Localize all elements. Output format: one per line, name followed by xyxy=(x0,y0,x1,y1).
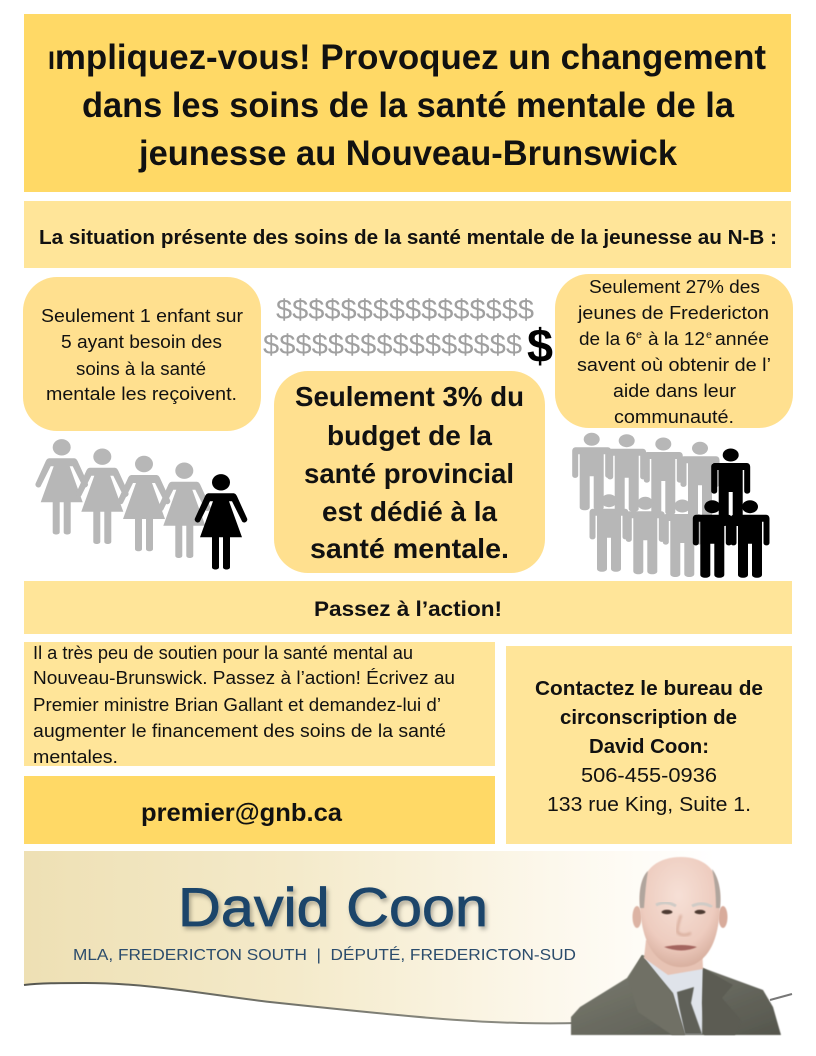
icon: group of people, 27% highlighted xyxy=(572,433,770,578)
callout: 27% des jeunes: Seulement 27% des xyxy=(589,276,760,297)
title heading xyxy=(48,38,766,173)
callout: 3% du budget: santé provincial xyxy=(304,458,514,489)
callout: 27% des jeunes: de la 6 xyxy=(579,328,636,349)
contact panel: 506-455-0936 xyxy=(581,764,717,787)
callout: 27% des jeunes: à la 12 xyxy=(648,328,705,349)
action text panel: Il a très peu de soutien pour la santé mental au xyxy=(33,642,413,663)
action text panel: Nouveau-Brunswick. Passez à l’action! Écrivez au xyxy=(33,667,455,688)
title panel xyxy=(24,14,791,192)
contact panel: Contactez le bureau de xyxy=(535,678,763,700)
callout: 1 enfant sur 5 xyxy=(23,277,261,431)
callout: 3% du budget: budget de la xyxy=(327,420,493,451)
action heading panel xyxy=(24,581,792,634)
email panel: premier@gnb.ca xyxy=(141,799,343,827)
icon: five women, one highlighted xyxy=(35,439,247,570)
callout: 27% des jeunes xyxy=(555,274,793,428)
subtitle panel xyxy=(24,201,791,268)
role line: MLA, FREDERICTON SOUTH | DÉPUTÉ, FREDERICTON-SUD xyxy=(73,945,576,964)
action text panel: mentales. xyxy=(33,746,118,767)
action text panel: Premier ministre Brian Gallant et demandez-lui d’ xyxy=(33,694,441,715)
callout: 27% des jeunes: communauté. xyxy=(614,406,734,427)
callout: 3% du budget: Seulement 3% du xyxy=(295,381,524,412)
callout: 3% du budget: santé mentale. xyxy=(310,533,509,564)
contact panel: circonscription de xyxy=(560,707,737,729)
callout: 1 enfant sur 5: Seulement 1 enfant sur xyxy=(41,305,243,326)
callout: 27% des jeunes: e xyxy=(636,329,642,341)
callout: 3% du budget: est dédié à la xyxy=(322,496,498,527)
dollar signs: 3% of budget xyxy=(263,294,553,372)
email panel xyxy=(24,776,495,844)
footer banner xyxy=(24,851,792,1035)
title heading: jeunesse au Nouveau-Brunswick xyxy=(138,134,678,173)
callout: 1 enfant sur 5: 5 ayant besoin des xyxy=(61,331,222,352)
callout: 3% du budget xyxy=(274,371,545,573)
contact panel: David Coon: xyxy=(589,736,709,758)
title heading: dans les soins de la santé mentale de la xyxy=(82,86,735,125)
subtitle text: La situation présente des soins de la santé mentale de la jeunesse au N-B : xyxy=(39,226,777,249)
title heading: Impliquez-vous! Provoquez un changement xyxy=(48,38,766,77)
dollar signs: 3% of budget: $ xyxy=(527,319,553,372)
callout: 27% des jeunes: savent où obtenir de l’ xyxy=(577,354,771,375)
portrait photo xyxy=(571,857,781,1035)
action text panel xyxy=(24,642,495,767)
callout: 27% des jeunes: e xyxy=(706,329,712,341)
action text panel: augmenter le financement des soins de la santé xyxy=(33,720,446,741)
callout: 27% des jeunes: aide dans leur xyxy=(613,380,736,401)
callout: 1 enfant sur 5: mentale les reçoivent. xyxy=(46,383,237,404)
callout: 27% des jeunes: jeunes de Fredericton xyxy=(577,302,769,323)
dollar signs: 3% of budget: $$$$$$$$$$$$$$$$ xyxy=(276,294,534,325)
callout: 1 enfant sur 5: soins à la santé xyxy=(76,358,206,379)
contact panel: 133 rue King, Suite 1. xyxy=(547,793,751,816)
contact panel xyxy=(506,646,792,844)
callout: 27% des jeunes: année xyxy=(715,328,769,349)
dollar signs: 3% of budget: $$$$$$$$$$$$$$$$ xyxy=(263,329,522,360)
action heading panel: Passez à l’action! xyxy=(314,598,502,621)
name logo: David Coon xyxy=(178,876,488,938)
